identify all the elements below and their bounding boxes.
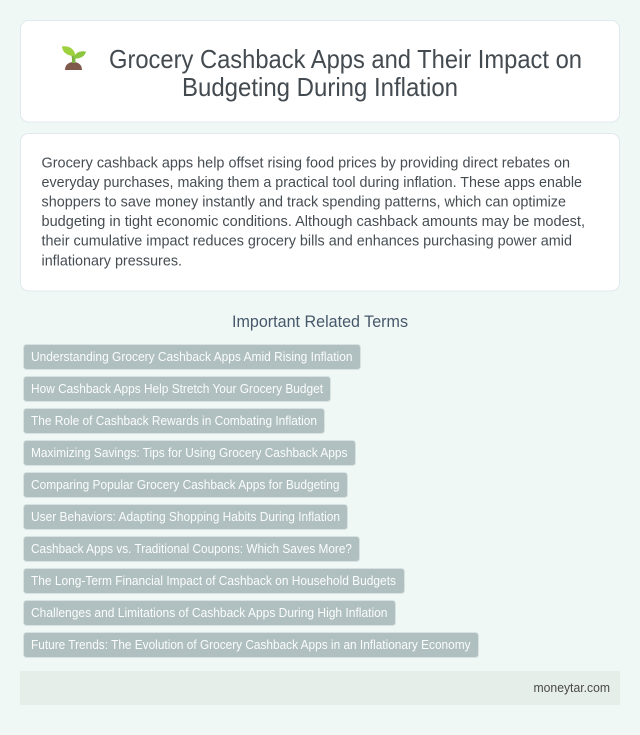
text block: summary: shoppers to save money instantly and track spending patterns, which can optimize bbox=[42, 194, 566, 210]
panel: summary paragraph bbox=[20, 134, 620, 291]
title bbox=[109, 44, 582, 102]
text block: summary: Grocery cashback apps help offset rising food prices by providing direct rebates on bbox=[42, 155, 570, 171]
tag 4 bbox=[24, 440, 356, 466]
text block: summary: budgeting in tight economic conditions. Although cashback amounts may be modest, bbox=[42, 214, 585, 230]
footer bbox=[20, 671, 620, 705]
tag 2 bbox=[24, 376, 330, 402]
tag 2: How Cashback Apps Help Stretch Your Grocery Budget bbox=[31, 382, 323, 396]
text block: summary bbox=[42, 155, 585, 269]
tag 1 bbox=[24, 344, 360, 370]
tag 5 bbox=[24, 472, 348, 498]
tag 10: Future Trends: The Evolution of Grocery Cashback Apps in an Inflationary Economy bbox=[31, 638, 471, 652]
tag 9 bbox=[24, 600, 396, 626]
tag 6: User Behaviors: Adapting Shopping Habits During Inflation bbox=[31, 510, 340, 524]
tag 6 bbox=[24, 504, 348, 530]
tag 8 bbox=[24, 568, 404, 594]
footer text: site name: moneytar.com bbox=[534, 681, 610, 695]
tag 7 bbox=[24, 536, 360, 562]
title: Budgeting During Inflation bbox=[182, 72, 458, 102]
tag 9: Challenges and Limitations of Cashback Apps During High Inflation bbox=[31, 606, 388, 620]
text block: summary: everyday purchases, making them a practical tool during inflation. These apps enable bbox=[42, 175, 582, 191]
tag 8: The Long-Term Financial Impact of Cashback on Household Budgets bbox=[31, 574, 396, 588]
heading: related terms: Important Related Terms bbox=[232, 313, 408, 331]
icon: seedling bbox=[62, 46, 86, 70]
text block: summary: inflationary pressures. bbox=[42, 253, 182, 269]
text block: summary: their cumulative impact reduces grocery bills and enhances purchasing power amid bbox=[42, 234, 572, 250]
tag 3 bbox=[24, 408, 324, 434]
tag 3: The Role of Cashback Rewards in Combating Inflation bbox=[31, 414, 317, 428]
tag 5: Comparing Popular Grocery Cashback Apps for Budgeting bbox=[31, 478, 340, 492]
tag 7: Cashback Apps vs. Traditional Coupons: Which Saves More? bbox=[31, 542, 352, 556]
tag 10 bbox=[24, 632, 478, 658]
tag 4: Maximizing Savings: Tips for Using Grocery Cashback Apps bbox=[31, 446, 348, 460]
list: related term tags bbox=[24, 344, 478, 658]
panel: title card bbox=[20, 20, 620, 122]
tag 1: Understanding Grocery Cashback Apps Amid Rising Inflation bbox=[31, 350, 352, 364]
title: Grocery Cashback Apps and Their Impact on bbox=[109, 44, 582, 74]
